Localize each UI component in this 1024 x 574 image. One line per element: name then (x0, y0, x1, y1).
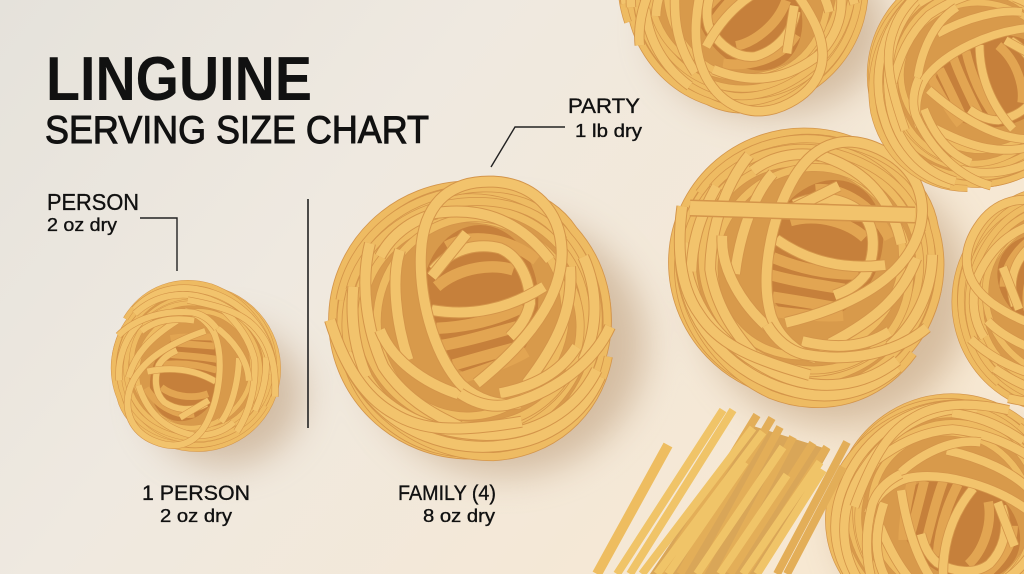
lone strand (597, 445, 668, 574)
callout: person: 2 oz dry (47, 215, 117, 235)
title: linguine: LINGUINE (46, 45, 312, 114)
title (45, 45, 429, 152)
bundle shadow (650, 425, 830, 574)
divider (307, 199, 309, 428)
uncooked linguine strands (597, 410, 847, 574)
label: 1 person (142, 482, 250, 526)
subtitle: serving size chart: SERVING SIZE CHART (45, 109, 429, 152)
pasta nest: top right (819, 0, 1024, 231)
callout: party: PARTY (568, 95, 640, 118)
callout: person: PERSON (47, 189, 139, 215)
pasta nest: family (296, 148, 639, 492)
straight strand across nest (690, 208, 915, 215)
pasta nest: 1 person (65, 236, 329, 501)
callout: party: 1 lb dry (575, 121, 642, 141)
label: family: 8 oz dry (423, 506, 495, 526)
pasta nest: right large (581, 40, 1024, 486)
label: family (398, 482, 496, 526)
pasta nest: top (547, 0, 951, 191)
callout: party (491, 95, 642, 167)
label: 1 person: 2 oz dry (160, 506, 232, 526)
back strands (660, 415, 847, 574)
pasta nest: right edge (874, 112, 1024, 492)
label: 1 person: 1 PERSON (142, 482, 250, 505)
pasta nest: bottom right (754, 313, 1024, 574)
front strands (617, 410, 823, 574)
callout: person (47, 189, 177, 271)
label: family: FAMILY (4) (398, 482, 496, 505)
